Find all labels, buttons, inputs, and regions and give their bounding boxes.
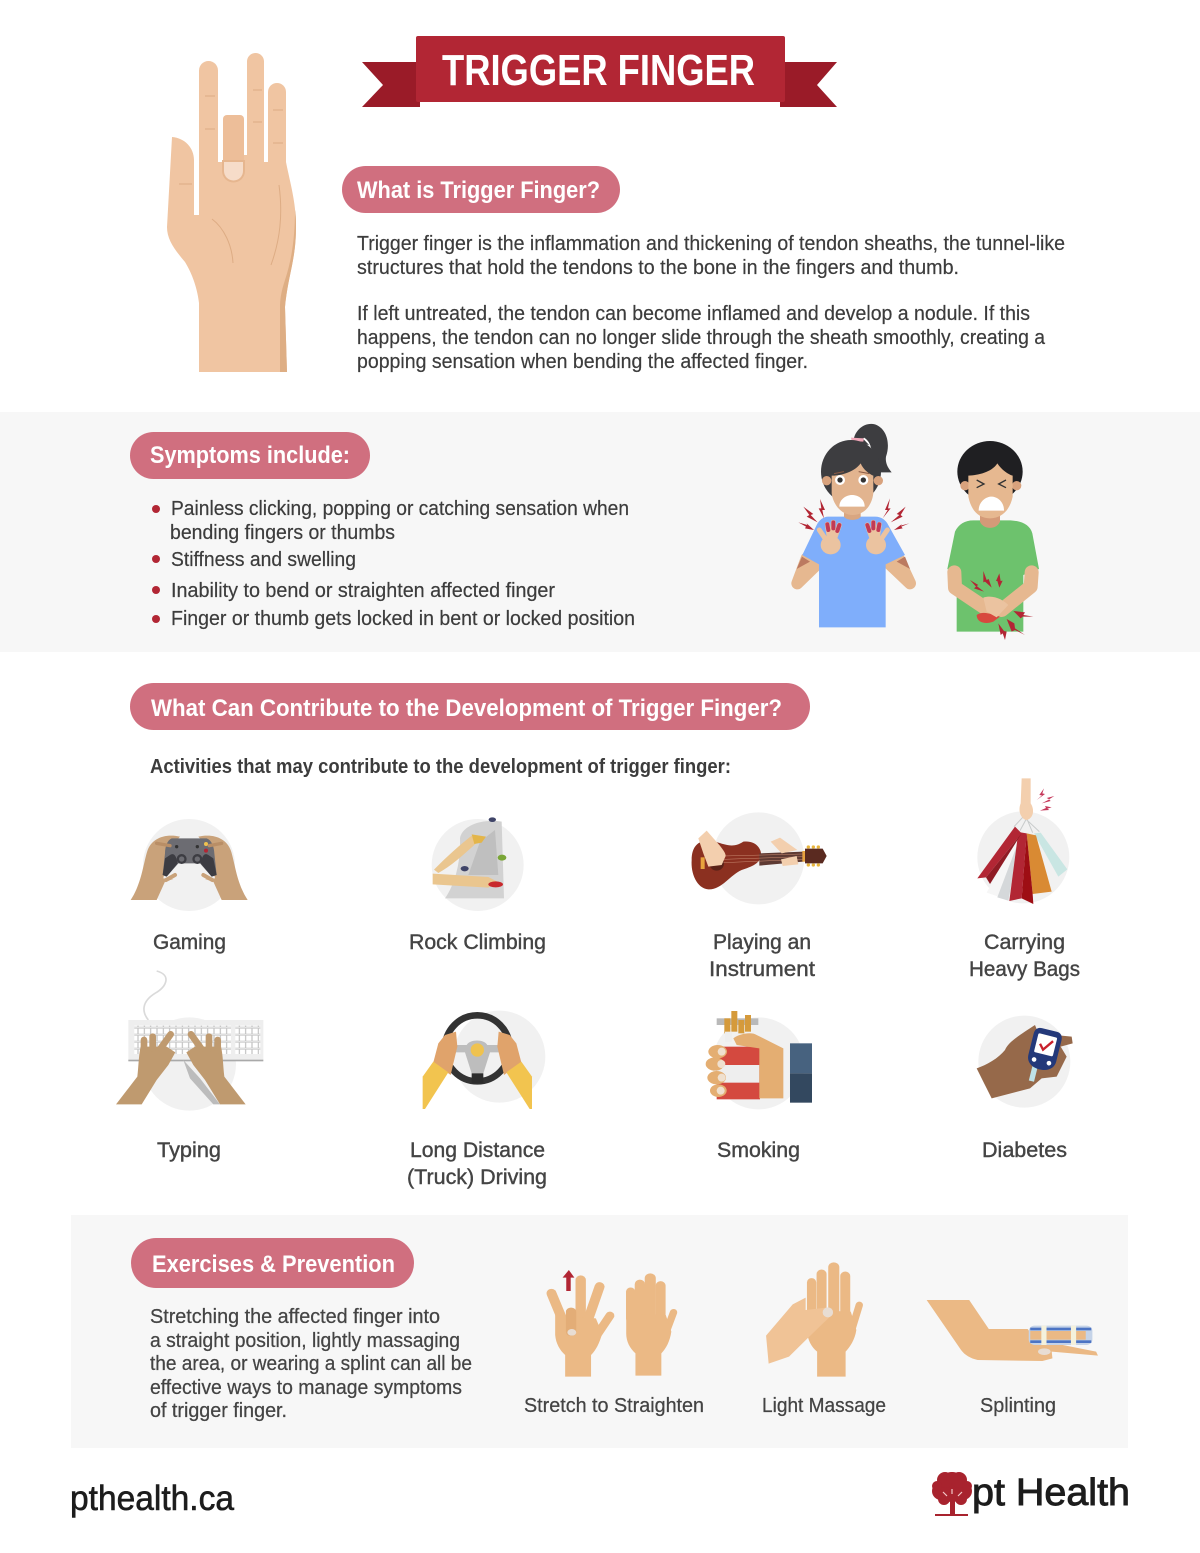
heading: What is Trigger Finger? — [342, 166, 620, 213]
list: symptoms: Finger or thumb gets locked in bent or locked position — [171, 608, 635, 630]
label: Playing an Instrument — [709, 931, 815, 981]
label: Long Distance (Truck) Driving: (Truck) Driving — [407, 1166, 547, 1189]
icon: steering wheel driving — [423, 1011, 545, 1109]
icon: light massage — [766, 1267, 859, 1377]
text block: exercises description — [150, 1306, 472, 1422]
text block: exercises description: a straight position, lightly massaging — [150, 1330, 460, 1352]
label: Stretch to Straighten: Stretch to Straighten — [524, 1395, 704, 1417]
icon: typing — [116, 971, 263, 1111]
icon: diabetes glucose meter — [977, 1016, 1073, 1108]
logo: pt Health: pt Health — [972, 1472, 1130, 1514]
text block: exercises description: the area, or wearing a splint can all be — [150, 1353, 472, 1375]
icon: rock climbing — [432, 817, 524, 911]
heading: Symptoms include — [130, 432, 370, 479]
text block: definition: If left untreated, the tendon can become inflamed and develop a nodule. If this — [357, 303, 1030, 325]
label: Rock Climbing: Rock Climbing — [409, 931, 546, 954]
icon: tree — [932, 1472, 972, 1516]
label: Long Distance (Truck) Driving: Long Distance — [410, 1139, 545, 1162]
heading: Exercises & Prevention: Exercises & Prevention — [152, 1251, 395, 1278]
icon: smoking — [706, 1011, 812, 1109]
title ribbon banner — [362, 36, 837, 107]
text block: definition: happens, the tendon can no longer slide through the sheath smoothly, creating a — [357, 327, 1046, 349]
label: Gaming: Gaming — [153, 931, 226, 954]
label: Playing an Instrument: Instrument — [709, 958, 815, 981]
text block: exercises description: effective ways to manage symptoms — [150, 1377, 462, 1399]
label: Smoking: Smoking — [717, 1139, 800, 1162]
label: Light Massage: Light Massage — [762, 1395, 886, 1417]
label: Carrying Heavy Bags: Heavy Bags — [969, 958, 1080, 981]
label: Long Distance (Truck) Driving — [407, 1139, 547, 1189]
icon: guitar — [692, 812, 827, 904]
list: symptoms — [152, 498, 635, 630]
label: Splinting: Splinting — [980, 1395, 1056, 1417]
icon: stretch to straighten hands — [551, 1270, 674, 1377]
woman with finger pain — [797, 424, 910, 627]
heading: Symptoms include: Symptoms include: — [150, 442, 350, 469]
text block: definition: structures that hold the tendons to the bone in the fingers and thumb. — [357, 257, 959, 279]
website url: pthealth.ca — [70, 1479, 235, 1518]
text block: exercises description: Stretching the affected finger into — [150, 1306, 440, 1328]
label: Diabetes: Diabetes — [982, 1139, 1067, 1162]
label: Typing: Typing — [157, 1139, 221, 1162]
heading: What is Trigger Finger?: What is Trigger Finger? — [357, 177, 600, 204]
subheading: activities: Activities that may contribute to the development of trigger finger: — [150, 756, 731, 778]
title ribbon banner: TRIGGER FINGER — [442, 46, 755, 95]
heading: What can contribute — [130, 683, 810, 730]
icon: finger splint — [927, 1300, 1098, 1361]
text block: definition: popping sensation when bending the affected finger. — [357, 351, 808, 373]
icon: carrying heavy bags — [977, 778, 1069, 904]
text block: definition — [357, 233, 1065, 373]
icon: gaming — [131, 819, 248, 911]
list: symptoms: Painless clicking, popping or catching sensation when — [171, 498, 629, 520]
man with stomach-level hand pain — [947, 441, 1039, 640]
list: symptoms: Inability to bend or straighten affected finger — [171, 580, 555, 602]
list: symptoms: bending fingers or thumbs — [170, 522, 395, 544]
list: symptoms: Stiffness and swelling — [171, 549, 356, 571]
label: Carrying Heavy Bags — [969, 931, 1080, 981]
label: Playing an Instrument: Playing an — [713, 931, 811, 954]
label: Carrying Heavy Bags: Carrying — [984, 931, 1065, 954]
illustration: two people in pain — [797, 424, 1039, 640]
text block: definition: Trigger finger is the inflammation and thickening of tendon sheaths, the tunnel-like — [357, 233, 1065, 255]
heading: What can contribute: What Can Contribute to the Development of Trigger Finger? — [151, 695, 782, 722]
text block: exercises description: of trigger finger. — [150, 1400, 287, 1422]
icon: raised hand with bent middle finger — [167, 53, 296, 372]
heading: Exercises & Prevention — [131, 1238, 414, 1288]
